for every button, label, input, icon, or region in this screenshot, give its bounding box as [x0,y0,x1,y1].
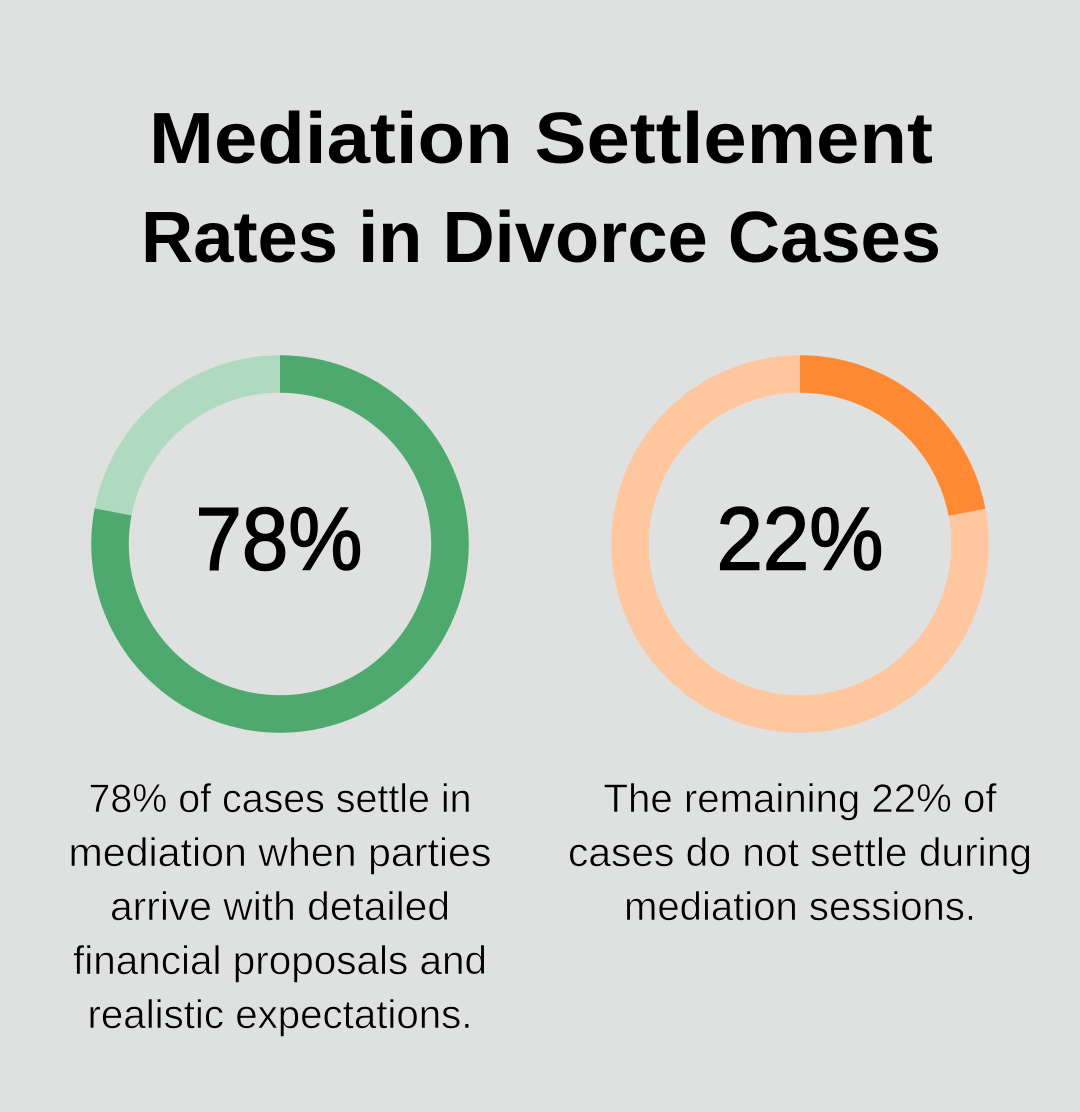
description: 78 percent: financial proposals and [73,939,487,983]
donut chart: 78 percent [110,374,450,714]
value: 78%: 78% [196,488,362,588]
panel: 78 percent settle [68,374,491,1037]
description: 22 percent: cases do not settle during [568,831,1032,875]
panel: 22 percent do not settle [568,374,1032,929]
value: 22%: 22% [716,488,884,588]
title: Rates in Divorce Cases [141,198,941,278]
description: 78 percent [68,777,491,1037]
description: 78 percent: 78% of cases settle in [88,777,472,821]
description: 78 percent: mediation when parties [68,831,491,875]
title [141,99,941,278]
description: 22 percent: The remaining 22% of [604,777,997,821]
description: 22 percent: mediation sessions. [624,885,976,929]
description: 22 percent [568,777,1032,929]
donut chart: 22 percent [630,374,970,714]
description: 78 percent: realistic expectations. [88,993,472,1037]
description: 78 percent: arrive with detailed [110,885,450,929]
title: Mediation Settlement [149,99,933,179]
